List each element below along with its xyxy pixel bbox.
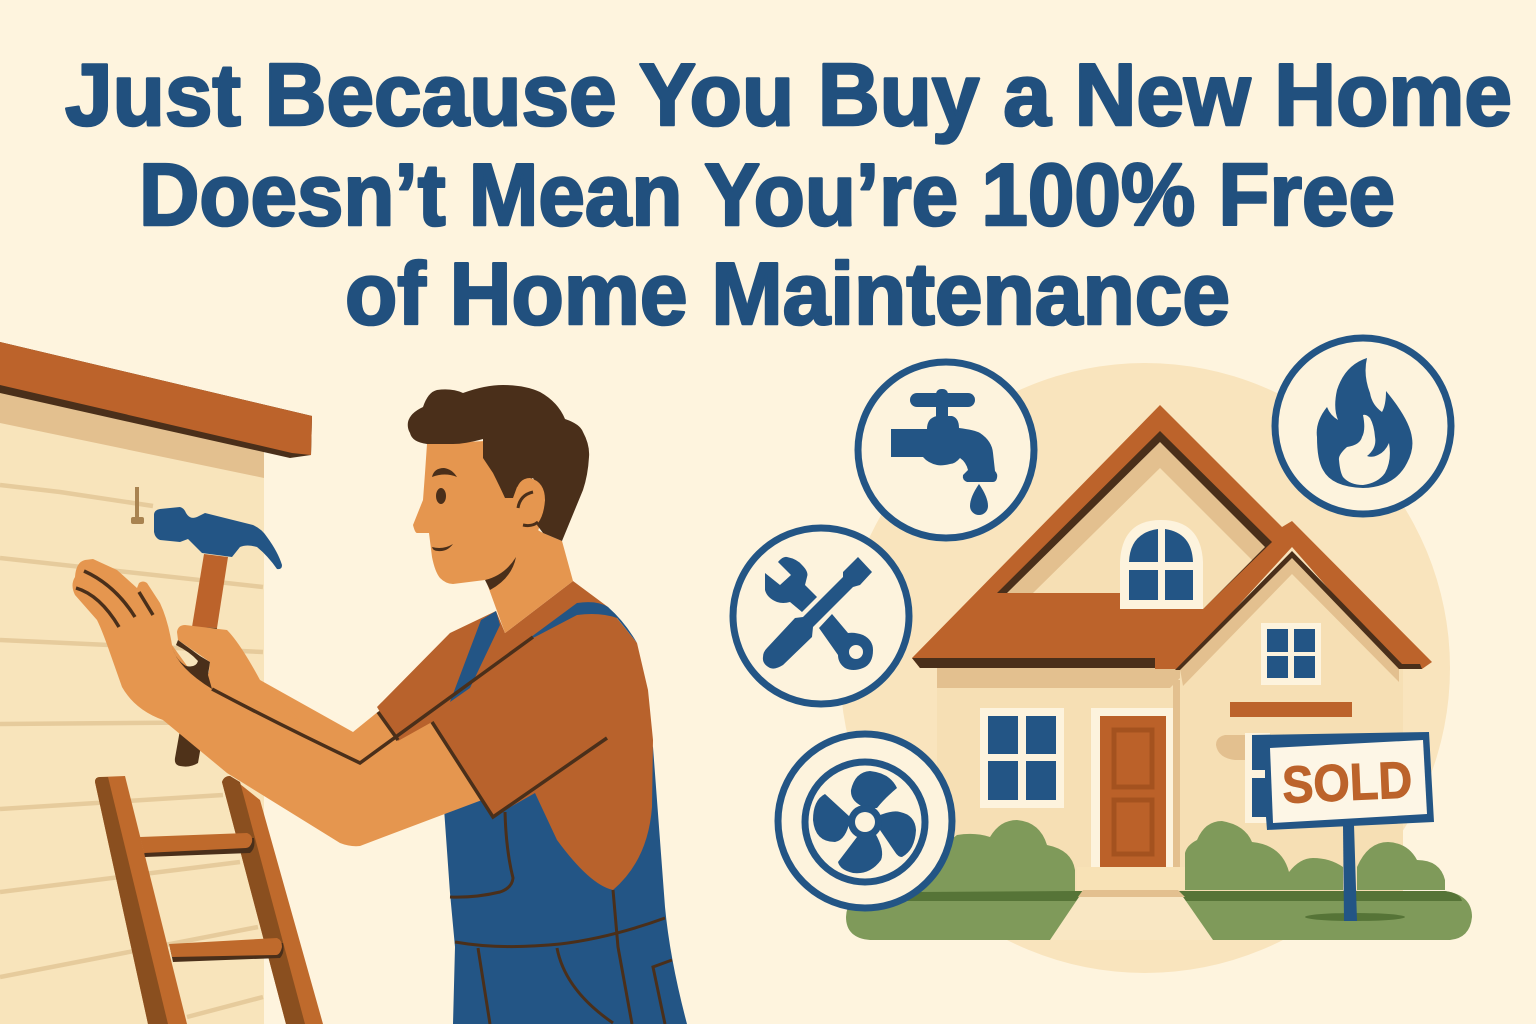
title: Doesn’t Mean You’re 100% Free [139, 145, 1395, 244]
ear [515, 478, 545, 525]
left window [980, 708, 1064, 808]
shirt [377, 581, 653, 890]
arm and open hand [72, 559, 482, 846]
upper gable lit wall [1033, 468, 1252, 609]
icon: wrench and screwdriver [733, 528, 909, 704]
sign board [1252, 732, 1434, 830]
face [413, 440, 545, 584]
right gable wall [1180, 552, 1403, 700]
title [65, 45, 1512, 343]
neck [485, 520, 573, 633]
roof eave [0, 342, 312, 458]
overalls [442, 730, 687, 1024]
door [1091, 708, 1173, 868]
hair [408, 385, 589, 541]
jaw shadow [485, 557, 516, 590]
eyebrow, eye and mouth [432, 468, 457, 551]
icon: flame [1275, 338, 1451, 514]
porch column shadow [1173, 680, 1180, 867]
hand crease shadow [172, 640, 212, 689]
ear line [518, 492, 538, 526]
eave dark band [912, 658, 1155, 668]
finger and arm lines [76, 571, 607, 817]
wall shadow blob [1216, 735, 1250, 760]
upper right window [1261, 623, 1321, 685]
awning bar [1230, 702, 1352, 717]
right gable shadow [1180, 552, 1399, 686]
bushes [920, 820, 1445, 892]
lawn [846, 891, 1472, 940]
upper gable opening [997, 431, 1272, 609]
overalls straps [450, 602, 637, 702]
porch step [1077, 867, 1186, 890]
eave shadow [937, 668, 1190, 688]
ladder [95, 776, 323, 1024]
sold sign [1252, 732, 1434, 921]
gripping fist [177, 625, 300, 720]
nail [131, 487, 144, 524]
upper gable wall [1007, 442, 1265, 609]
house [912, 405, 1432, 897]
icon: water tap [858, 362, 1034, 538]
house wall with siding [0, 342, 312, 1024]
house walls [937, 665, 1403, 891]
sold label: SOLD [1281, 751, 1413, 815]
post shadow [1305, 913, 1405, 921]
right gable dark edge [1175, 551, 1422, 670]
icon: ventilation fan [778, 734, 952, 908]
hammer [154, 507, 282, 767]
sign panel [1270, 740, 1427, 823]
window behind sign [1245, 733, 1270, 823]
sign post [1343, 825, 1357, 921]
roof silhouette [912, 405, 1432, 669]
overalls seams [450, 812, 672, 1024]
title: Just Because You Buy a New Home [65, 45, 1512, 144]
dormer window [1120, 520, 1203, 609]
title: of Home Maintenance [345, 244, 1230, 343]
background circle [840, 363, 1450, 973]
worker [72, 385, 687, 1024]
walkway shadow [1078, 890, 1185, 897]
